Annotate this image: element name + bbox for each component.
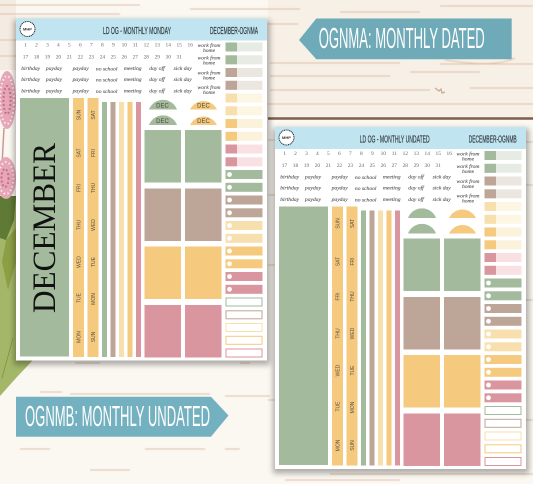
date numbers: 27 xyxy=(392,163,397,169)
event word stickers: meeting xyxy=(383,197,401,203)
weekday strip: Monday start: MON xyxy=(76,331,82,343)
date numbers: 2 xyxy=(294,151,297,157)
event word stickers: work from xyxy=(457,150,479,158)
date numbers: 25 xyxy=(370,163,375,169)
event word stickers: payday xyxy=(304,197,322,203)
event word stickers: work from xyxy=(198,84,220,91)
event word stickers: birthday xyxy=(280,186,300,192)
event word stickers xyxy=(280,150,479,204)
date numbers: 13 xyxy=(414,151,419,157)
event word stickers: home xyxy=(203,76,216,82)
stem xyxy=(2,128,4,165)
date numbers: 4 xyxy=(316,151,319,157)
sticker sheet: OGNMB monthly undated xyxy=(273,127,529,474)
date numbers: 18 xyxy=(293,163,298,169)
lower flower xyxy=(0,157,16,199)
event word stickers: no school xyxy=(355,198,377,204)
thin colour strips xyxy=(102,102,141,357)
event word stickers: work from xyxy=(457,192,479,200)
sticker sheet: OGNMA monthly dated xyxy=(14,18,270,365)
date numbers: 7 xyxy=(90,42,93,48)
date numbers: 14 xyxy=(425,151,430,157)
date numbers: 25 xyxy=(111,54,116,60)
event word stickers: birthday xyxy=(21,66,41,72)
logo badge: MHP xyxy=(23,26,32,32)
date numbers: 3 xyxy=(305,151,308,157)
date numbers: 15 xyxy=(177,42,182,48)
weekday strip: Sunday start xyxy=(88,98,98,357)
event word stickers: work from xyxy=(198,54,220,62)
dome stickers with DEC: DEC xyxy=(156,104,169,110)
date numbers: 9 xyxy=(112,42,115,48)
two-tone tab stickers xyxy=(226,42,262,166)
upper flower xyxy=(0,71,16,129)
event word stickers: no school xyxy=(96,89,118,95)
date numbers: 19 xyxy=(45,54,50,60)
event word stickers: payday xyxy=(45,66,63,72)
date numbers: 16 xyxy=(447,151,452,157)
event word stickers: no school xyxy=(96,66,118,72)
date numbers: 5 xyxy=(68,42,71,48)
sheet paper xyxy=(16,18,267,360)
event word stickers: day off xyxy=(408,184,425,192)
main leaf xyxy=(0,196,33,396)
event word stickers: sick day xyxy=(174,88,192,94)
date numbers: 22 xyxy=(337,163,342,169)
event word stickers: home xyxy=(203,48,216,54)
date numbers: 22 xyxy=(78,54,83,60)
date numbers: 11 xyxy=(392,151,397,157)
weekday strip: Sunday start: SUN xyxy=(91,331,97,342)
event word stickers: work from xyxy=(457,178,479,185)
event word stickers: payday xyxy=(72,66,89,72)
logo badge: MHP xyxy=(282,135,291,140)
sheet paper xyxy=(275,127,526,469)
two-tone tab stickers xyxy=(484,151,522,275)
weekday strip: Sunday start: MON xyxy=(91,293,97,305)
date numbers: 29 xyxy=(155,54,160,60)
date numbers: 4 xyxy=(57,42,60,48)
date numbers: 6 xyxy=(79,42,82,48)
dome stickers with DEC: DEC xyxy=(156,119,169,125)
weekday strip: Sunday start: TUE xyxy=(350,365,356,376)
weekday strip: Monday start: FRI xyxy=(76,184,82,192)
event word stickers: payday xyxy=(331,174,348,180)
weekday strip: Monday start: SAT xyxy=(335,257,341,266)
weekday strip: Sunday start: MON xyxy=(350,401,356,413)
sheet title: LD OG - MONTHLY MONDAY xyxy=(103,26,171,37)
date numbers: 21 xyxy=(67,54,72,60)
weekday strip: Monday start: FRI xyxy=(335,292,341,301)
weekday strip: Sunday start: FRI xyxy=(350,257,356,266)
header bar xyxy=(16,18,267,40)
event word stickers: meeting xyxy=(124,77,142,83)
event word stickers: payday xyxy=(45,77,63,83)
weekday strip: Monday start: WED xyxy=(335,364,341,376)
date numbers xyxy=(23,42,193,60)
weekday strip: Monday start: MON xyxy=(335,439,341,451)
date numbers: 29 xyxy=(414,163,419,169)
weekday strip: Sunday start: THU xyxy=(91,182,97,193)
date numbers: 31 xyxy=(177,54,182,60)
date numbers: 30 xyxy=(166,54,171,60)
event word stickers xyxy=(21,42,220,96)
event word stickers: payday xyxy=(304,174,322,180)
date numbers: 27 xyxy=(133,54,138,60)
dotted tab stickers xyxy=(226,170,262,294)
date numbers: 23 xyxy=(348,163,353,169)
date numbers: 23 xyxy=(89,54,94,60)
date numbers: 24 xyxy=(359,163,364,169)
callout: OGNMA monthly dated xyxy=(299,18,512,59)
date numbers: 7 xyxy=(349,151,352,157)
weekday strip: Sunday start: SAT xyxy=(91,110,97,120)
logo badge xyxy=(279,130,294,145)
event word stickers: day off xyxy=(149,65,166,72)
sheet title: LD OG - MONTHLY UNDATED xyxy=(360,134,430,146)
event word stickers: home xyxy=(462,156,475,162)
weekday strip: Monday start: THU xyxy=(335,328,341,339)
event word stickers: sick day xyxy=(174,77,192,83)
dotted tab stickers xyxy=(484,278,522,402)
callout: OGNMB monthly undated xyxy=(16,397,228,437)
date numbers xyxy=(282,151,452,169)
event word stickers: home xyxy=(203,60,216,66)
event word stickers: day off xyxy=(408,174,425,180)
header bar xyxy=(275,127,526,149)
date numbers: 20 xyxy=(315,163,320,169)
event word stickers: day off xyxy=(149,76,166,83)
blank dome stickers xyxy=(408,208,476,234)
event word stickers: payday xyxy=(331,197,348,203)
event word stickers: work from xyxy=(198,42,220,49)
date numbers: 3 xyxy=(46,42,49,48)
date numbers: 10 xyxy=(381,151,386,157)
date numbers: 6 xyxy=(338,151,341,157)
event word stickers: payday xyxy=(304,186,322,192)
event word stickers: sick day xyxy=(174,66,192,72)
date numbers: 31 xyxy=(436,163,441,169)
text: OGNMB: MONTHLY UNDATED xyxy=(25,401,210,433)
date numbers: 12 xyxy=(403,151,408,157)
dome stickers with DEC: DEC xyxy=(197,104,210,110)
weekday strip: Sunday start: THU xyxy=(350,291,356,302)
weekday strip: Sunday start: WED xyxy=(350,327,356,339)
full box stickers xyxy=(404,238,480,466)
date numbers: 28 xyxy=(144,54,149,60)
date numbers: 19 xyxy=(304,163,310,169)
event word stickers: sick day xyxy=(433,197,451,203)
full box stickers xyxy=(144,130,222,358)
date numbers: 5 xyxy=(327,151,330,157)
event word stickers: no school xyxy=(96,78,118,84)
date numbers: 11 xyxy=(133,42,138,48)
thin colour strips xyxy=(361,210,400,466)
event word stickers: no school xyxy=(355,186,377,192)
sheet shadow xyxy=(14,20,270,365)
event word stickers: home xyxy=(462,169,475,175)
dome stickers with DEC: DEC xyxy=(197,119,210,125)
weekday strip: Monday start: TUE xyxy=(76,292,82,303)
weekday strip: Monday start: SUN xyxy=(76,109,82,120)
weekday strip: Monday start: TUE xyxy=(335,401,341,412)
dome stickers with DEC xyxy=(149,100,217,125)
event word stickers: birthday xyxy=(21,88,41,94)
date numbers: 28 xyxy=(403,163,408,169)
date numbers: 14 xyxy=(166,42,171,48)
weekday strip: Sunday start: WED xyxy=(91,219,97,231)
date numbers: 21 xyxy=(326,163,331,169)
date numbers: 9 xyxy=(371,151,374,157)
logo badge xyxy=(20,22,35,36)
event word stickers: meeting xyxy=(383,174,401,180)
date numbers: 1 xyxy=(24,42,27,48)
date numbers: 26 xyxy=(381,163,386,169)
event word stickers: meeting xyxy=(124,66,142,72)
weekday strip: Sunday start: SUN xyxy=(350,440,356,451)
event word stickers: payday xyxy=(72,77,89,83)
event word stickers: payday xyxy=(72,88,89,94)
month name: DECEMBER xyxy=(27,143,63,313)
flowers and leaves at left edge xyxy=(0,71,33,396)
weekday strip: Monday start: SUN xyxy=(335,218,341,229)
date numbers: 8 xyxy=(101,42,104,48)
date numbers: 10 xyxy=(122,42,127,48)
event word stickers: day off xyxy=(408,196,425,203)
weekday strip: Monday start xyxy=(73,98,84,357)
date numbers: 13 xyxy=(155,42,160,48)
date numbers: 17 xyxy=(282,163,288,169)
outlined tab stickers xyxy=(485,406,521,466)
date numbers: 2 xyxy=(35,42,38,48)
blank month column xyxy=(279,206,328,465)
date numbers: 26 xyxy=(122,54,127,60)
weekday strip: Monday start: SAT xyxy=(76,148,82,158)
sheet shadow xyxy=(273,128,529,474)
event word stickers: birthday xyxy=(21,77,41,83)
weekday strip: Monday start xyxy=(332,206,343,466)
event word stickers: meeting xyxy=(383,186,401,192)
date numbers: 20 xyxy=(56,54,61,60)
event word stickers: sick day xyxy=(433,174,451,180)
date numbers: 12 xyxy=(144,42,149,48)
event word stickers: work from xyxy=(198,70,220,76)
weekday strip: Monday start: WED xyxy=(76,256,82,268)
event word stickers: birthday xyxy=(280,197,300,203)
event word stickers: work from xyxy=(457,163,479,170)
event word stickers: home xyxy=(203,90,216,96)
event word stickers: no school xyxy=(355,175,377,181)
date numbers: 17 xyxy=(23,54,28,60)
event word stickers: payday xyxy=(45,88,63,94)
weekday strip: Sunday start xyxy=(346,206,358,466)
weekday strip: Monday start: THU xyxy=(76,219,82,230)
date numbers: 16 xyxy=(188,42,193,48)
date numbers: 15 xyxy=(436,151,441,157)
outlined tab stickers xyxy=(226,298,262,357)
date numbers: 8 xyxy=(360,151,363,157)
event word stickers: day off xyxy=(149,88,166,94)
event word stickers: home xyxy=(462,198,475,204)
event word stickers: meeting xyxy=(124,88,142,94)
weekday strip: Sunday start: SAT xyxy=(350,219,356,228)
event word stickers: birthday xyxy=(280,174,300,180)
date numbers: 24 xyxy=(100,54,105,60)
month column xyxy=(20,98,69,356)
event word stickers: payday xyxy=(331,186,348,192)
event word stickers: sick day xyxy=(433,186,451,192)
date numbers: 1 xyxy=(283,151,286,157)
event word stickers: home xyxy=(462,184,475,190)
weekday strip: Sunday start: TUE xyxy=(91,256,97,267)
header bar: DECEMBER-OGNMA xyxy=(210,26,258,37)
weekday strip: Sunday start: FRI xyxy=(91,149,97,157)
date numbers: 18 xyxy=(34,54,40,60)
date numbers: 30 xyxy=(425,163,430,169)
